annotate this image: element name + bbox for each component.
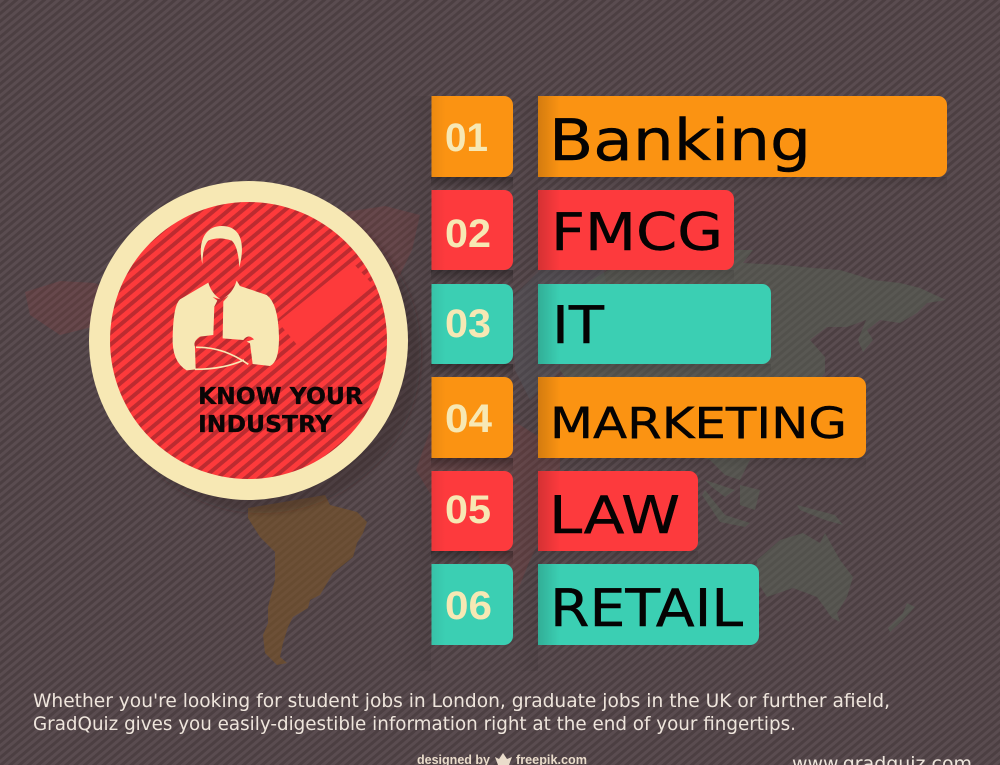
badge outer ring [89,181,408,500]
row 01: banking [432,96,947,177]
number tab 02: 02 [445,212,491,256]
bar: retail: RETAIL [550,579,743,639]
bar: it: IT [552,296,604,356]
row 03: it [432,284,771,364]
badge shadow [103,195,421,513]
world map [25,206,946,665]
map: australia [757,533,853,622]
column shading between number tabs and bars [513,96,538,671]
bar: banking [538,96,947,177]
row 04: marketing [432,377,866,458]
number tab 04: 04 [445,397,493,441]
number tab 05 [432,471,513,551]
number tab 06: 06 [445,584,492,628]
number tab 04 [432,377,513,458]
map: asia [560,250,946,480]
badge title: KNOW YOUR [198,384,363,410]
row shadows [431,177,947,564]
bar: marketing: MARKETING [550,399,847,449]
footer description: Whether you're looking for student jobs in London, graduate jobs in the UK or further afield, [33,690,890,712]
number tab 01: 01 [445,116,488,160]
row 05: law [432,471,698,551]
map: new zealand [888,603,915,632]
bar: marketing [538,377,866,458]
number tab 02 [432,190,513,270]
map: europe [510,255,610,400]
bar: banking: Banking [549,108,811,174]
bar: law [538,471,698,551]
number tab 06 [432,564,513,645]
bar: fmcg [538,190,734,270]
column shading [395,96,431,671]
map: southeast asia islands [702,480,843,527]
badge title [198,384,363,438]
number tab 03: 03 [445,302,491,346]
footer description [33,690,890,735]
bar: it [538,284,771,364]
badge: know your industry [89,181,421,513]
map: north america [25,206,420,500]
number tab 03 [432,284,513,364]
badge red striped disc [110,202,387,479]
footer description: GradQuiz gives you easily-digestible information right at the end of your fingertips. [33,713,796,735]
map: south america [248,495,367,665]
icon: businessman silhouette [173,226,279,370]
icon: freepik crown [495,753,512,765]
freepik credit [417,753,587,765]
number tab 01 [432,96,513,177]
badge title: INDUSTRY [198,412,332,438]
row 02: fmcg [432,190,734,270]
map: africa [416,415,560,610]
row 06: retail [432,564,759,645]
bar: retail [538,564,759,645]
number tab 05: 05 [445,488,491,532]
bar: law: LAW [549,486,680,546]
bar: fmcg: FMCG [551,203,723,263]
